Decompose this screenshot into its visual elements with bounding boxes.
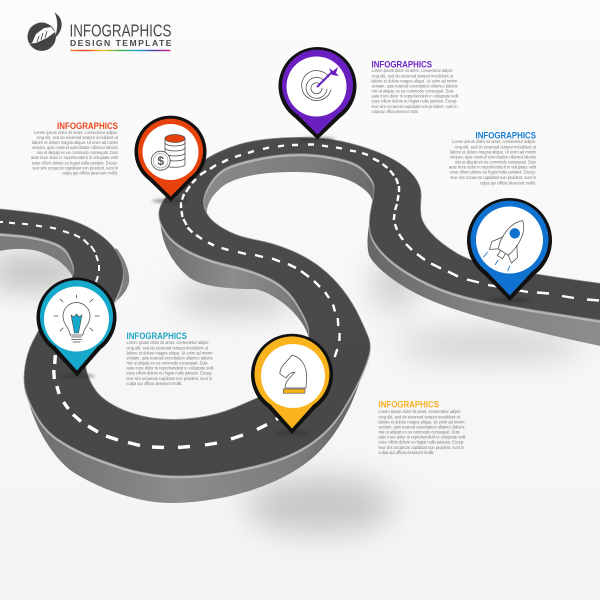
- road wall: left bend: [100, 248, 129, 304]
- orange body: nisi ut aliquip ex ea commodo consequat. Duis: [37, 150, 118, 155]
- icon: rocket: [482, 213, 535, 273]
- yellow body: aute irure dolor in reprehenderit in voluptate velit: [378, 435, 466, 440]
- teal body: teur sint occaecat cupidatat non proident, sunt in: [126, 376, 213, 381]
- purple body: esse cillum dolore eu fugiat nulla pariatur. Excep-: [372, 99, 458, 104]
- orange body: Lorem ipsum dolor sit amet, consectetur adipis-: [34, 130, 119, 135]
- panel: teal text: [126, 330, 214, 386]
- blue body: veniam, quis nostrud exercitation ullamco laboris: [450, 154, 536, 160]
- panel: yellow text: [378, 398, 466, 455]
- road: [0, 137, 600, 503]
- yellow heading: INFOGRAPHICS: [378, 398, 439, 409]
- purple body: labore et dolore magna aliqua. Ut enim ad minim: [372, 78, 458, 83]
- road wall: inner loop: [200, 148, 378, 216]
- yellow body: culpa qui officia deserunt mollit.: [378, 450, 434, 455]
- blue body: labore et dolore magna aliqua. Ut enim ad minim: [450, 149, 536, 154]
- road dashes: left section: [0, 222, 99, 282]
- purple heading: INFOGRAPHICS: [372, 59, 432, 70]
- blue body: aute irure dolor in reprehenderit in voluptate velit: [449, 165, 537, 170]
- orange body: esse cillum dolore eu fugiat nulla pariatur. Excep-: [32, 160, 119, 165]
- logo rainbow line: [70, 50, 170, 51]
- road dashes: S curve and top: [181, 144, 599, 357]
- orange body: culpa qui officia deserunt mollit.: [62, 170, 118, 176]
- teal body: cing elit, sed do eiusmod tempor incididunt ut: [126, 345, 209, 350]
- yellow body: veniam, quis nostrud exercitation ullamco laboris: [378, 424, 464, 430]
- road dashes: bottom loop: [54, 355, 284, 448]
- road wall: left section: [0, 230, 78, 277]
- teal body: esse cillum dolore eu fugiat nulla pariatur. Excep-: [126, 371, 213, 376]
- yellow body: [378, 409, 466, 455]
- icon: target: [302, 67, 339, 101]
- purple body: cing elit, sed do eiusmod tempor incididunt ut: [372, 73, 454, 78]
- road shadows: [0, 256, 585, 533]
- logo subtitle: DESIGN TEMPLATE: [70, 38, 172, 48]
- purple body: nisi ut aliquip ex ea commodo consequat. Duis: [372, 89, 454, 94]
- teal body: veniam, quis nostrud exercitation ullamco laboris: [126, 356, 212, 360]
- yellow body: labore et dolore magna aliqua. Ut enim ad minim: [378, 419, 465, 424]
- teal body: nisi ut aliquip ex ea commodo consequat. Duis: [126, 361, 208, 366]
- icon: coins: $: [157, 154, 164, 168]
- logo icon: [24, 12, 62, 51]
- yellow body: nisi ut aliquip ex ea commodo consequat. Duis: [378, 430, 460, 435]
- blue heading: INFOGRAPHICS: [476, 130, 536, 141]
- icon: knight: [280, 355, 307, 393]
- blue body: nisi ut aliquip ex ea commodo consequat. Duis: [455, 160, 536, 165]
- orange heading: INFOGRAPHICS: [57, 120, 118, 131]
- pin: yellow knight: [251, 334, 333, 435]
- logo: [24, 12, 172, 51]
- logo title: INFOGRAPHICS: [70, 21, 172, 41]
- purple body: [372, 68, 459, 114]
- yellow body: cing elit, sed do eiusmod tempor incididunt ut: [378, 414, 461, 419]
- blue body: culpa qui officia deserunt mollit.: [480, 180, 536, 186]
- road wall: right section: [368, 225, 600, 347]
- orange body: labore et dolore magna aliqua. Ut enim ad minim: [32, 140, 118, 145]
- teal body: labore et dolore magna aliqua. Ut enim ad minim: [126, 350, 213, 355]
- blue body: [449, 139, 537, 186]
- pin: teal bulb: [36, 278, 116, 378]
- road asphalt: [0, 137, 600, 476]
- panel: orange text: [31, 120, 119, 176]
- teal heading: INFOGRAPHICS: [126, 330, 187, 341]
- road rim: [0, 139, 600, 478]
- yellow body: teur sint occaecat cupidatat non proident, sunt in: [378, 445, 465, 450]
- orange body: aute irure dolor in reprehenderit in voluptate velit: [31, 155, 119, 160]
- pin: orange coins: [134, 116, 206, 203]
- road wall: S curve: [160, 215, 320, 338]
- orange body: cing elit, sed do eiusmod tempor incididunt ut: [36, 135, 119, 140]
- orange body: veniam, quis nostrud exercitation ullamco laboris: [32, 145, 118, 150]
- panel: blue text: [449, 130, 537, 186]
- road wall: bottom loop: [24, 360, 366, 503]
- yellow body: esse cillum dolore eu fugiat nulla pariatur. Excep-: [378, 440, 465, 445]
- purple body: Lorem ipsum dolor sit amet, consectetur adipis-: [372, 68, 454, 73]
- teal body: culpa qui officia deserunt mollit.: [126, 381, 182, 386]
- blue body: teur sint occaecat cupidatat non proident, sunt in: [450, 175, 537, 180]
- orange body: teur sint occaecat cupidatat non proident, sunt in: [32, 165, 119, 170]
- blue body: esse cillum dolore eu fugiat nulla pariatur. Excep-: [450, 170, 537, 175]
- purple body: aute irure dolor in reprehenderit in voluptate velit: [372, 94, 459, 99]
- pin: purple target: [278, 47, 356, 141]
- blue body: cing elit, sed do eiusmod tempor incididunt ut: [454, 144, 537, 149]
- panel: purple text: [372, 59, 459, 114]
- purple body: culpa qui officia deserunt mollit.: [372, 109, 418, 114]
- pin: blue rocket: [467, 198, 552, 302]
- yellow body: Lorem ipsum dolor sit amet, consectetur adipis-: [378, 409, 462, 414]
- icon: bulb: [54, 295, 99, 342]
- orange body: [31, 130, 119, 176]
- teal body: aute irure dolor in reprehenderit in voluptate velit: [126, 366, 214, 371]
- blue body: Lorem ipsum dolor sit amet, consectetur adipis-: [452, 139, 537, 144]
- teal body: Lorem ipsum dolor sit amet, consectetur adipis-: [126, 340, 210, 345]
- purple body: teur sint occaecat cupidatat non proident, sunt in: [372, 104, 458, 109]
- purple body: veniam, quis nostrud exercitation ullamco laboris: [372, 84, 458, 88]
- teal body: [126, 340, 214, 386]
